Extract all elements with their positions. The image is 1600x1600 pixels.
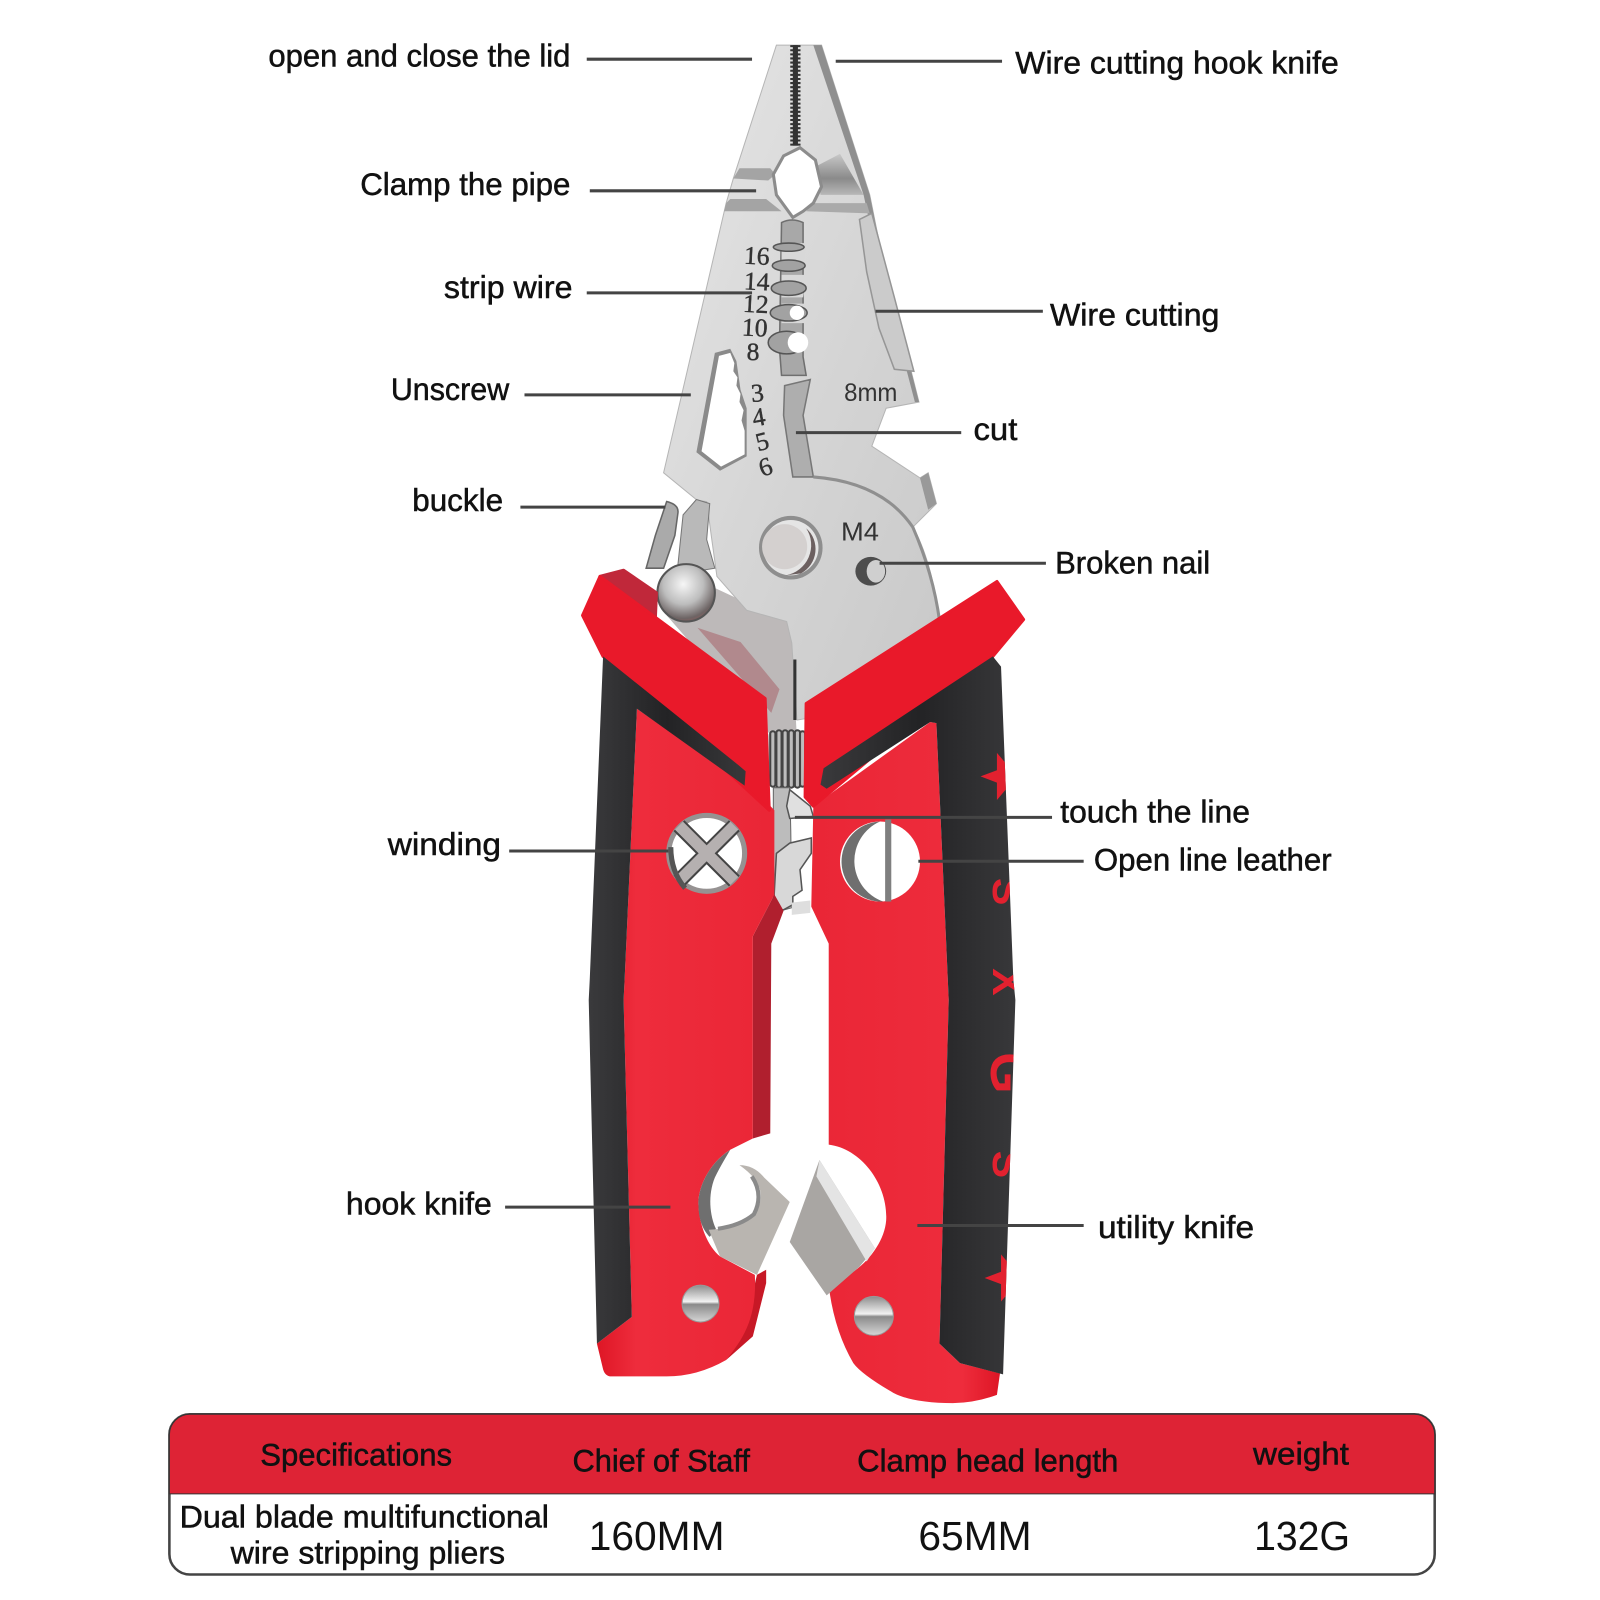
gauge numbers: 5 <box>752 426 772 457</box>
label: clamp the pipe: Clamp the pipe <box>360 166 570 202</box>
center stem metal <box>773 788 792 913</box>
right black grip <box>821 656 1015 1374</box>
right red plate <box>811 722 1000 1403</box>
left inner dark strip <box>753 894 784 1138</box>
strip wire holes <box>788 306 808 353</box>
table header band <box>169 1414 1435 1494</box>
left handle <box>583 570 790 1376</box>
star top <box>980 753 1006 800</box>
center slit <box>793 659 796 720</box>
label: open and close the lid: open and close the lid <box>268 37 570 73</box>
lower tooth <box>773 838 811 910</box>
lower jaw reflection <box>697 628 779 713</box>
utility knife blade <box>790 1160 875 1295</box>
header: specifications: Specifications <box>260 1436 452 1472</box>
label: broken nail: Broken nail <box>1055 544 1210 580</box>
label: wire cutting: Wire cutting <box>1050 297 1219 333</box>
unscrew hole <box>702 353 745 467</box>
upper tooth <box>787 790 813 818</box>
right collar <box>805 582 1024 806</box>
red grip brand marks: X <box>984 968 1030 996</box>
strip wire notches <box>768 243 807 354</box>
value: 160MM: 160MM <box>589 1513 724 1559</box>
label: open line leather: Open line leather <box>1094 841 1332 877</box>
specifications table <box>169 1414 1435 1574</box>
table body <box>169 1414 1435 1574</box>
strip wire column <box>779 220 806 375</box>
label: cut: cut <box>973 411 1018 447</box>
gauge numbers: 12 <box>742 289 769 319</box>
gauge numbers: M4 <box>841 519 879 547</box>
label: buckle: buckle <box>412 482 503 518</box>
hook knife crescent <box>698 1150 730 1237</box>
hook knife blade <box>709 1165 790 1275</box>
right jaw lower groove <box>806 203 870 213</box>
gauge numbers: 4 <box>750 402 768 433</box>
broken nail hole <box>855 557 886 586</box>
red grip brand marks: S <box>984 1151 1030 1178</box>
faint tooth tip <box>792 901 810 915</box>
strip wire fins <box>782 243 806 323</box>
right head edge bevel <box>813 45 919 402</box>
value: product name: wire stripping pliers <box>230 1534 505 1570</box>
left red plate <box>597 709 774 1376</box>
label: wire cutting hook knife: Wire cutting hook knife <box>1015 44 1339 80</box>
gauge numbers: 14 <box>743 266 771 297</box>
lower jaw plate <box>667 585 797 738</box>
left jaw grooves <box>724 168 782 211</box>
label: strip wire: strip wire <box>444 269 572 305</box>
value: 65MM: 65MM <box>918 1513 1032 1559</box>
label: unscrew: Unscrew <box>391 371 509 407</box>
right rivet <box>854 1296 893 1335</box>
header: chief of staff: Chief of Staff <box>572 1442 750 1478</box>
left rivet <box>682 1285 719 1322</box>
pivot blade arc <box>813 477 939 621</box>
label: hook knife: hook knife <box>346 1185 492 1221</box>
label: utility knife: utility knife <box>1098 1209 1254 1245</box>
gauge numbers: 3 <box>750 378 765 408</box>
star bottom <box>984 1254 1007 1302</box>
left lower red rim <box>726 1270 766 1360</box>
gauge numbers: 6 <box>755 451 776 483</box>
gauge numbers: 10 <box>741 312 768 343</box>
gauge numbers: 8mm <box>844 380 897 407</box>
label: winding: winding <box>387 826 501 862</box>
pliers illustration <box>583 45 1038 1403</box>
gauge numbers: 16 <box>743 241 771 271</box>
red grip brand marks <box>980 753 1014 1302</box>
left black grip <box>589 656 746 1344</box>
serrated slit <box>793 45 798 146</box>
wire cutting blade <box>859 213 914 371</box>
cut channel <box>784 379 813 477</box>
right handle <box>805 582 1038 1403</box>
gauge numbers <box>741 241 897 547</box>
notch end bevel <box>920 473 936 510</box>
value: product name: Dual blade multifunctional <box>180 1499 549 1535</box>
red grip brand marks: S <box>984 878 1030 905</box>
spring <box>768 730 806 788</box>
left collar <box>583 576 769 810</box>
open line leather hole <box>840 819 920 902</box>
red grip brand marks: G <box>979 1052 1038 1094</box>
pivot bolt <box>759 516 823 579</box>
pliers metal head <box>664 45 939 720</box>
header: clamp head length: Clamp head length <box>857 1442 1118 1478</box>
pipe clamp hole <box>773 148 822 217</box>
right jaw bevel <box>816 154 864 195</box>
value: product name <box>180 1499 549 1570</box>
left collar top shade <box>600 570 656 617</box>
unscrew hole shadow <box>696 349 747 471</box>
buckle <box>646 499 715 622</box>
header: weight: weight <box>1252 1435 1349 1471</box>
gauge numbers: 8 <box>747 337 759 366</box>
label: touch the line: touch the line <box>1060 793 1250 829</box>
winding hole X <box>667 813 747 893</box>
value: 132G: 132G <box>1254 1513 1350 1559</box>
